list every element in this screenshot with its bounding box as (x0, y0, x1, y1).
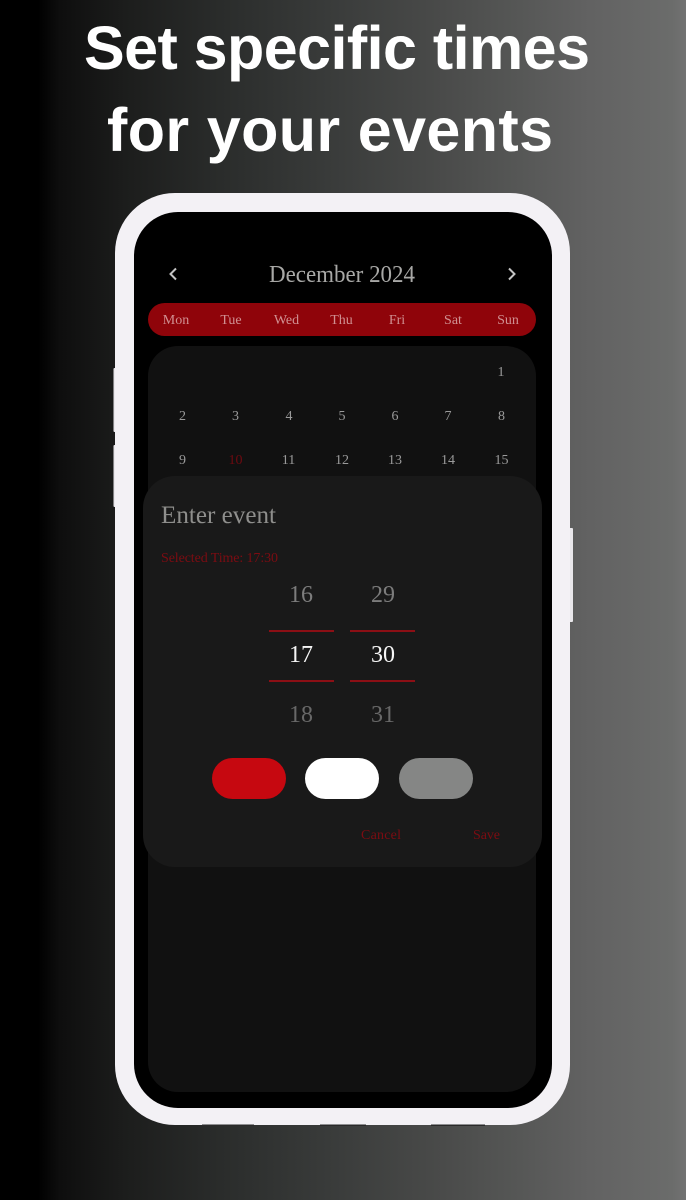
calendar dates: 2 (179, 409, 186, 424)
calendar dates: 14 (441, 453, 455, 468)
dialog: enter event (143, 476, 542, 867)
weekday bar: Mon (163, 313, 189, 328)
phone frame (115, 193, 570, 1125)
title: Set specific times (84, 14, 590, 82)
weekday bar: Thu (330, 313, 353, 328)
calendar dates: 3 (232, 409, 239, 424)
weekday bar: Wed (274, 313, 299, 328)
title (84, 14, 590, 164)
calendar dates: 5 (338, 409, 346, 424)
calendar dates: 9 (179, 453, 186, 468)
calendar dates: 7 (444, 409, 452, 424)
phone screen (134, 212, 552, 1108)
time picker: 16 (289, 582, 313, 608)
time picker: 17 (289, 642, 313, 668)
weekday bar (148, 303, 536, 336)
calendar dates: 10 (228, 453, 242, 468)
time picker: 30 (371, 642, 395, 668)
calendar header (170, 262, 514, 288)
calendar dates: 12 (335, 453, 349, 468)
calendar dates: 1 (498, 365, 504, 380)
time picker: 31 (371, 702, 395, 728)
icon: next arrow (509, 268, 514, 280)
calendar dates: 15 (494, 453, 508, 468)
time picker (269, 582, 415, 728)
weekday bar: Tue (220, 313, 242, 328)
calendar dates: 13 (388, 453, 402, 468)
icon: previous arrow (170, 268, 176, 280)
colour options (212, 758, 473, 799)
weekday bar: Sat (444, 313, 462, 328)
calendar dates (179, 365, 508, 468)
calendar dates: 6 (392, 409, 398, 424)
calendar dates: 8 (498, 409, 505, 424)
dialog actions (361, 828, 500, 843)
dialog actions: Cancel (361, 828, 401, 843)
weekday bar: Fri (389, 313, 405, 328)
icon: phone bottom speaker marks (202, 1124, 485, 1126)
dialog heading: Enter event (161, 502, 276, 529)
time picker: 18 (289, 702, 313, 728)
phone mockup (114, 193, 573, 1126)
title: for your events (107, 96, 553, 164)
selected time: Selected Time: 17:30 (161, 551, 278, 566)
weekday bar: Sun (497, 313, 519, 328)
time picker: 29 (371, 582, 395, 608)
month label: December 2024 (269, 262, 415, 288)
calendar dates: 11 (282, 453, 295, 468)
calendar dates: 4 (286, 409, 292, 424)
calendar grid panel (148, 346, 536, 1092)
dialog actions: Save (473, 828, 500, 843)
icon: phone side buttons (114, 368, 573, 622)
